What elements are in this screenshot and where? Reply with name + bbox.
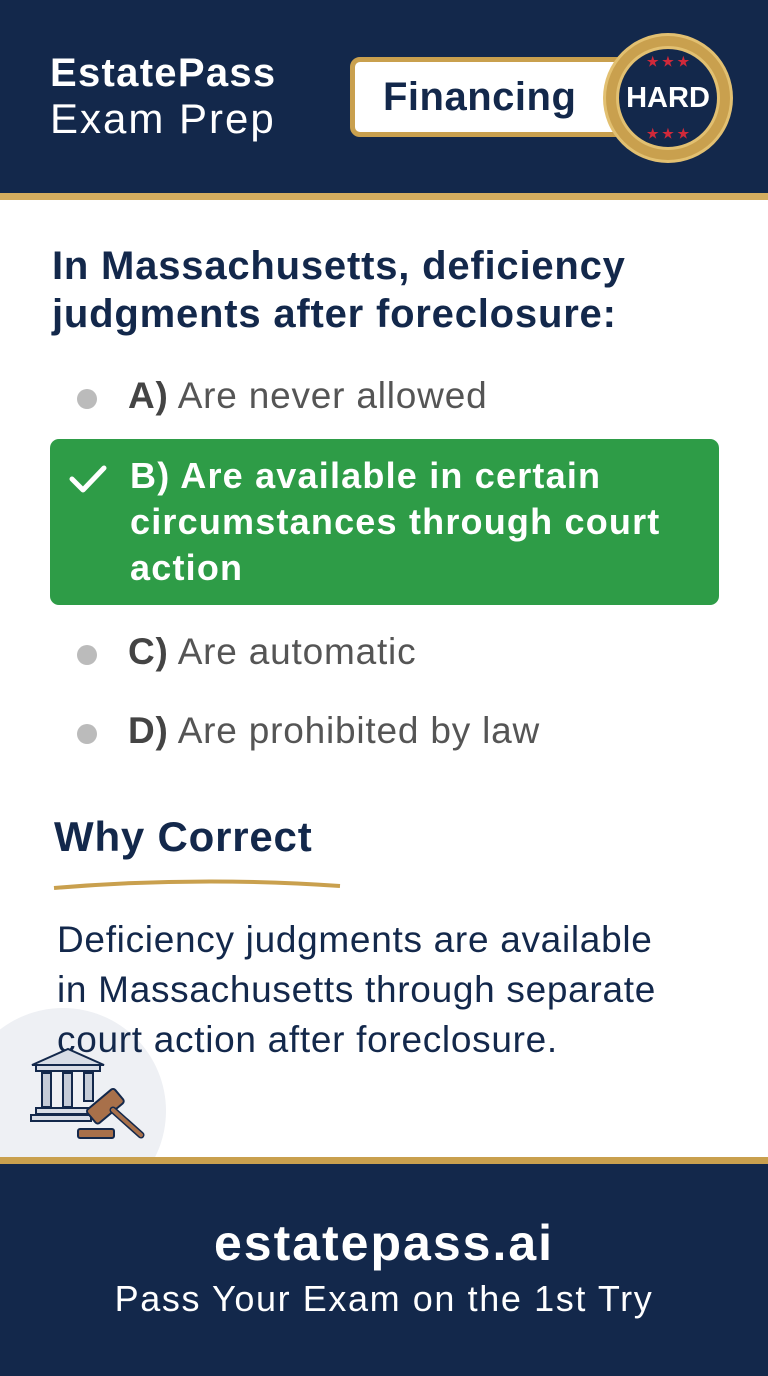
badge: HARD (606, 36, 730, 160)
text: C) Are automatic (128, 631, 416, 672)
category pill (350, 57, 630, 137)
option B correct (50, 439, 719, 605)
text: D) Are prohibited by law (128, 710, 540, 751)
footer (0, 1157, 768, 1376)
tagline: Pass Your Exam on the 1st Try (115, 1278, 653, 1319)
badge: HARD: ★ ★ ★ (647, 54, 689, 69)
explanation (57, 919, 656, 1060)
question: In Massachusetts, deficiency judgments after foreclosure: (52, 244, 626, 336)
option B correct: B) Are available in certain circumstances through court action (130, 455, 660, 588)
brand (50, 51, 276, 142)
category pill: Financing (383, 75, 576, 119)
text: A) Are never allowed (128, 375, 487, 416)
explanation: in Massachusetts through separate (57, 969, 656, 1010)
badge: HARD: ★ ★ ★ (647, 126, 689, 141)
explanation: Deficiency judgments are available (57, 919, 653, 960)
header (0, 0, 768, 200)
heading: why correct: Why Correct (54, 813, 313, 860)
option C (77, 631, 416, 672)
badge: HARD: HARD (626, 82, 710, 114)
footer url: estatepass.ai (214, 1215, 554, 1271)
option A (77, 375, 487, 416)
icon: check (70, 466, 106, 492)
brand: EstatePass (50, 51, 276, 95)
option D (77, 710, 540, 751)
icon: courthouse background circle (0, 1008, 166, 1214)
brand: Exam Prep (50, 95, 276, 142)
explanation: court action after foreclosure. (57, 1019, 558, 1060)
icon: courthouse and gavel (30, 1048, 144, 1139)
